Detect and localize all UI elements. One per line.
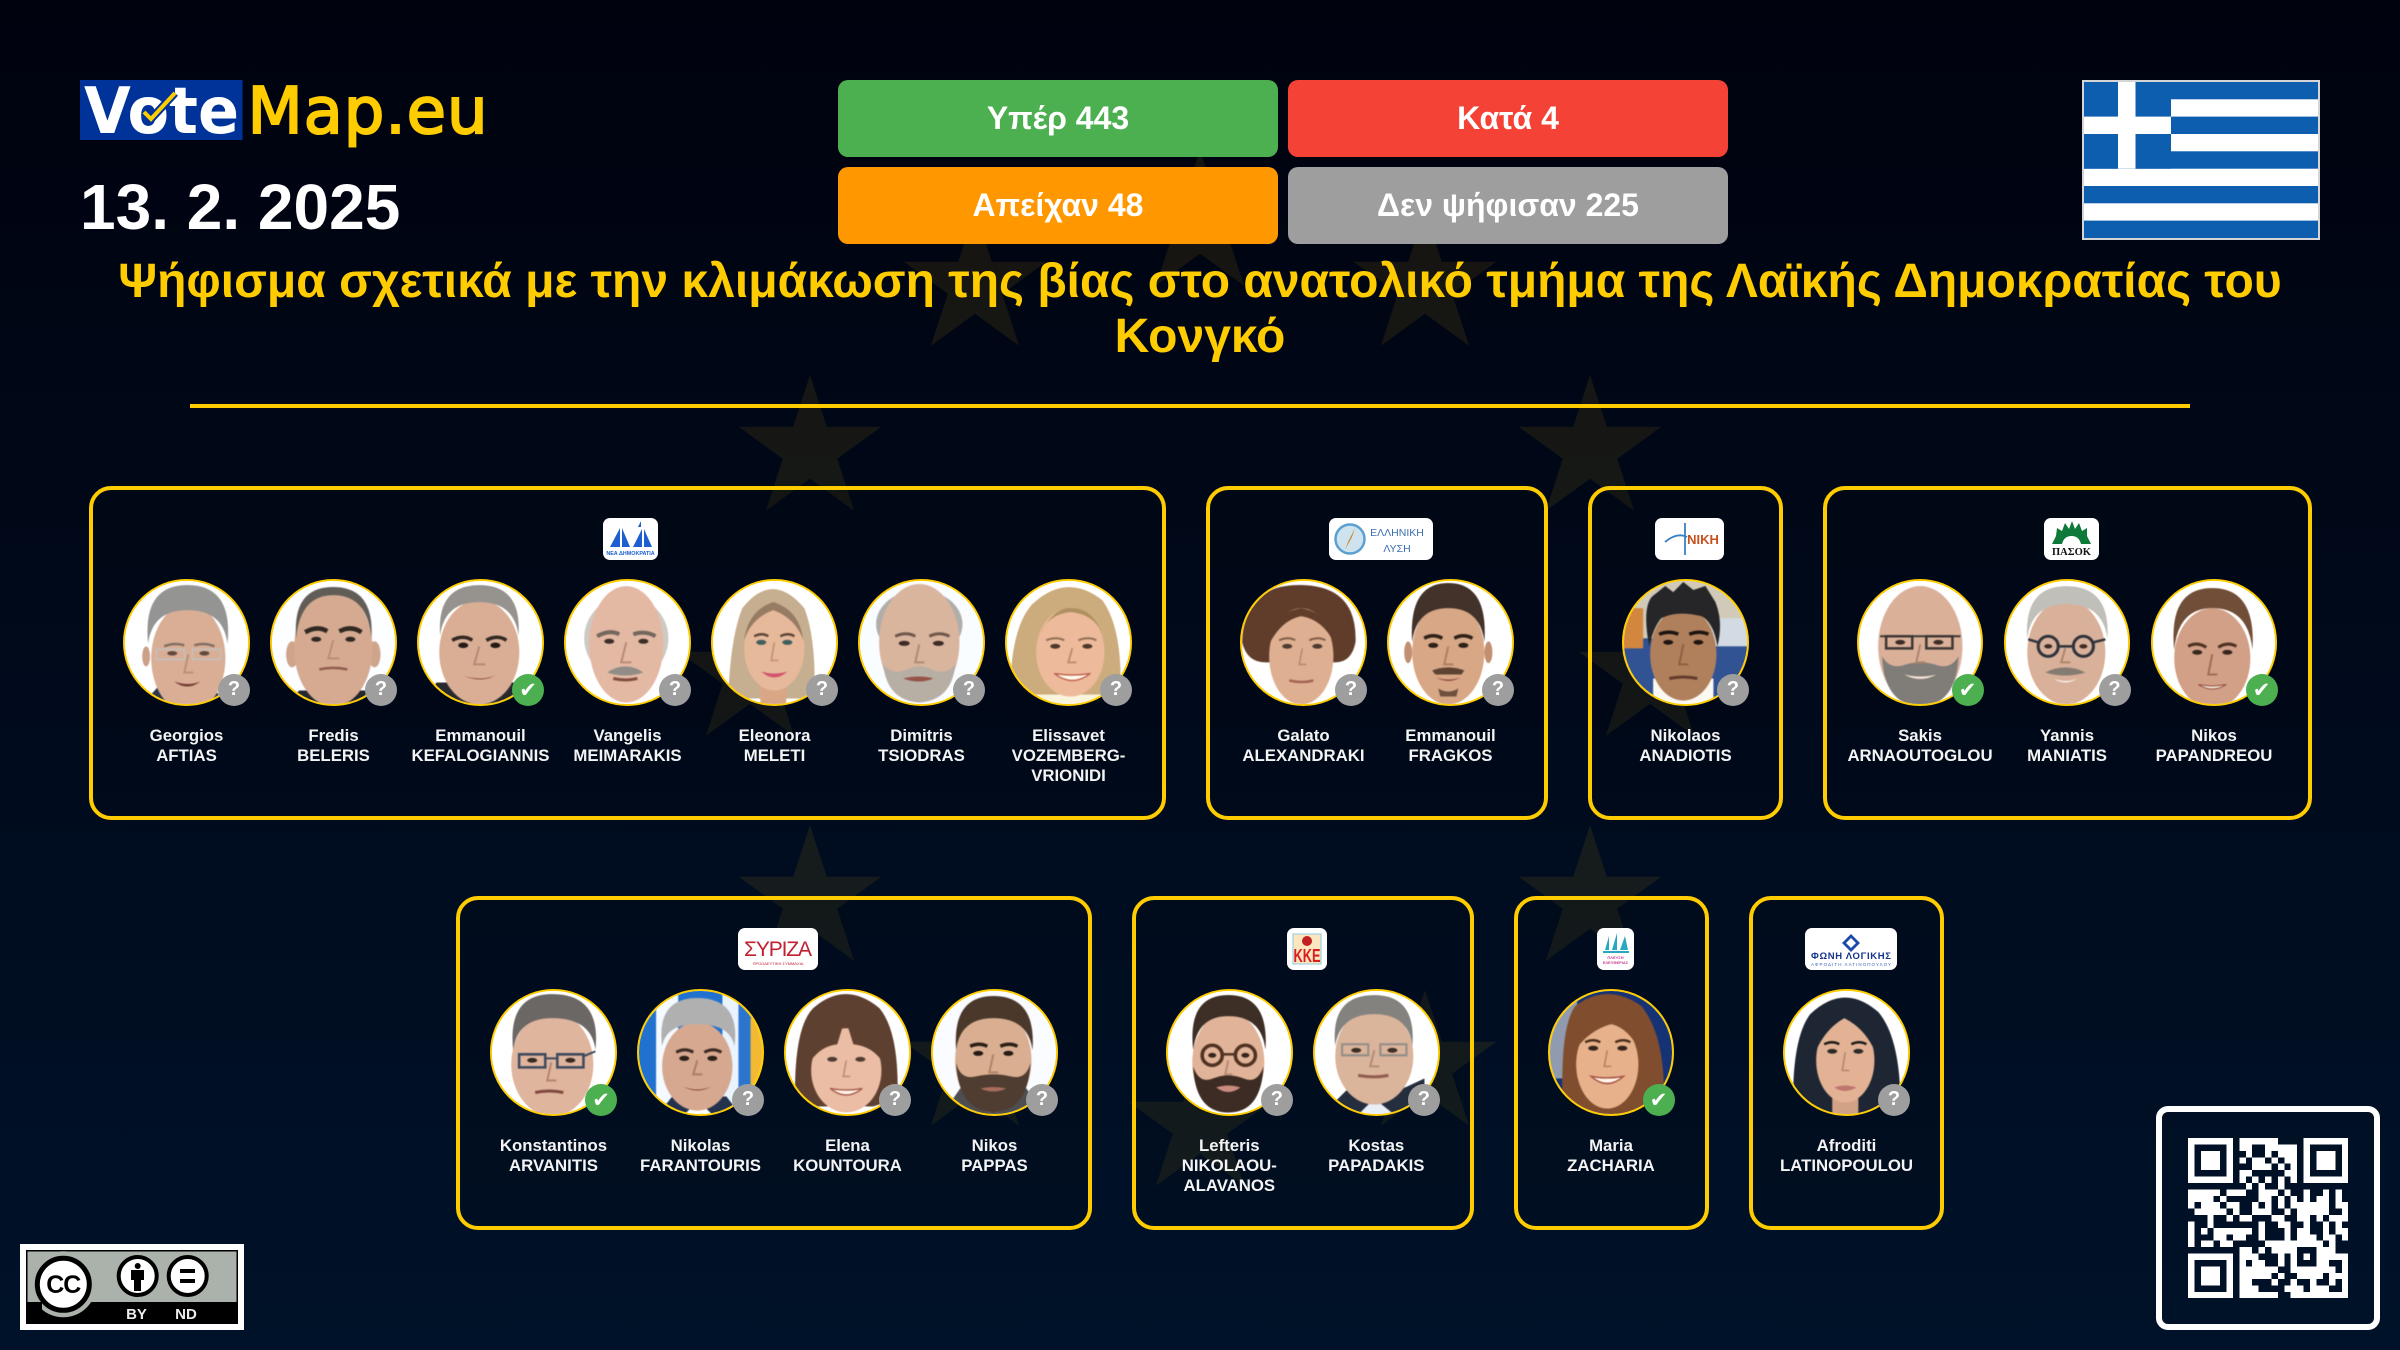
- name: Emmanouil: [435, 726, 526, 745]
- member: Kostas Papadakis: [1313, 989, 1440, 1175]
- photo: [1622, 579, 1749, 706]
- flag: Greece: [2082, 80, 2320, 240]
- status: for: ✔: [592, 1088, 610, 1112]
- name: Nikos: [2191, 726, 2237, 745]
- status: unknown: ?: [1110, 678, 1122, 700]
- photo: [711, 579, 838, 706]
- member: Elissavet Vozemberg-Vrionidi: [1005, 579, 1132, 785]
- status: unknown: [1026, 1084, 1058, 1116]
- status: unknown: [1261, 1084, 1293, 1116]
- panel: Niki: [1588, 486, 1783, 820]
- status: unknown: [732, 1084, 764, 1116]
- name: VOZEMBERG-: [1012, 746, 1125, 765]
- name: NIKOLAOU-: [1182, 1156, 1277, 1175]
- name: ALEXANDRAKI: [1242, 746, 1365, 765]
- member: Galato Alexandraki: [1240, 579, 1367, 765]
- status: unknown: ?: [816, 678, 828, 700]
- party logo: Plefsi Eleftherias: ΕΛΕΥΘΕΡΙΑΣ: [1602, 960, 1628, 965]
- status: unknown: ?: [228, 678, 240, 700]
- member: Konstantinos Arvanitis: [490, 989, 617, 1175]
- status: unknown: [1408, 1084, 1440, 1116]
- name: Galato: [1277, 726, 1330, 745]
- member: Eleonora Meleti: [711, 579, 838, 765]
- status: for: [1642, 1084, 1674, 1116]
- name: [1242, 726, 1365, 765]
- status: unknown: [1100, 674, 1132, 706]
- photo: [1857, 579, 1983, 706]
- name: PAPPAS: [961, 1156, 1028, 1175]
- member: Yannis Maniatis: [2004, 579, 2131, 765]
- name: BELERIS: [297, 746, 370, 765]
- status: unknown: [365, 674, 397, 706]
- photo: [1166, 989, 1293, 1116]
- date: 13. 2. 2025: [80, 171, 400, 243]
- party logo: SYRIZA: ΠΡΟΟΔΕΥΤΙΚΗ ΣΥΜΜΑΧΙΑ: [753, 961, 804, 966]
- status: unknown: [1482, 674, 1514, 706]
- name: Konstantinos: [500, 1136, 607, 1155]
- name: Maria: [1589, 1136, 1633, 1155]
- status: unknown: ?: [1271, 1088, 1283, 1110]
- status: unknown: [806, 674, 838, 706]
- party logo: KKE: [1287, 928, 1327, 970]
- name: VRIONIDI: [1031, 766, 1106, 785]
- status: unknown: ?: [2108, 678, 2121, 700]
- status: unknown: ?: [1418, 1088, 1430, 1110]
- member: Fredis Beleris: [270, 579, 397, 765]
- name: Emmanouil: [1405, 726, 1496, 745]
- party logo: Foni Logikis: [1805, 928, 1897, 970]
- photo: [1240, 579, 1367, 706]
- name: [793, 1136, 902, 1175]
- status: unknown: [2098, 674, 2130, 706]
- name: KEFALOGIANNIS: [412, 746, 550, 765]
- status: for: ✔: [2253, 678, 2270, 702]
- name: [573, 726, 682, 765]
- name: Kostas: [1348, 1136, 1404, 1155]
- status: unknown: [1878, 1084, 1910, 1116]
- name: [150, 726, 223, 765]
- name: ANADIOTIS: [1639, 746, 1732, 765]
- photo: [1005, 579, 1132, 706]
- name: [739, 726, 811, 765]
- party logo: SYRIZA: ΣΥΡΙΖΑ: [744, 938, 812, 961]
- photo: [637, 989, 764, 1116]
- party logo: Niki: ΝΙΚΗ: [1687, 532, 1719, 547]
- panel: KKE: [1132, 896, 1474, 1230]
- name: Eleonora: [739, 726, 810, 745]
- name: ZACHARIA: [1567, 1156, 1655, 1175]
- photo: [123, 579, 250, 706]
- party logo: ND: [603, 518, 658, 560]
- status: unknown: ?: [1492, 678, 1504, 700]
- name: [961, 1136, 1028, 1175]
- vote tally: for: Υπέρ 443: [987, 100, 1129, 136]
- name: [1847, 726, 1993, 765]
- party logo: Elliniki Lysi: ΛΥΣΗ: [1383, 543, 1411, 555]
- party logo: PASOK: [2044, 518, 2099, 560]
- name: ALAVANOS: [1183, 1176, 1275, 1195]
- name: [412, 726, 550, 765]
- vote tally: abstained: [838, 167, 1278, 244]
- photo: [1783, 989, 1910, 1116]
- member: Vangelis Meimarakis: [564, 579, 691, 765]
- name: Lefteris: [1199, 1136, 1260, 1155]
- vote tally: abstained: Απείχαν 48: [973, 187, 1143, 223]
- name: ARNAOUTOGLOU: [1847, 746, 1993, 765]
- name: [640, 1136, 761, 1175]
- status: unknown: ?: [375, 678, 387, 700]
- photo: [564, 579, 691, 706]
- party logo: SYRIZA: [738, 928, 818, 970]
- name: FARANTOURIS: [640, 1156, 761, 1175]
- name: Nikolas: [671, 1136, 730, 1155]
- panel: Elliniki Lysi: [1206, 486, 1548, 820]
- photo: [1387, 579, 1514, 706]
- party logo: ND: ΝΕΑ ΔΗΜΟΚΡΑΤΙΑ: [606, 551, 655, 557]
- status: unknown: ?: [1345, 678, 1357, 700]
- photo: [784, 989, 911, 1116]
- status: unknown: [953, 674, 985, 706]
- member: Nikos Pappas: [931, 989, 1058, 1175]
- photo: [1313, 989, 1440, 1116]
- title: Κονγκό: [1115, 310, 1285, 363]
- name: Nikolaos: [1651, 726, 1720, 745]
- party logo: Foni Logikis: ΑΦΡΟΔΙΤΗ ΛΑΤΙΝΟΠΟΥΛΟΥ: [1811, 962, 1891, 967]
- status: unknown: [1335, 674, 1367, 706]
- party logo: Plefsi Eleftherias: [1596, 928, 1634, 970]
- status: for: ✔: [1650, 1088, 1667, 1112]
- status: for: ✔: [1959, 678, 1976, 702]
- status: unknown: ?: [1727, 678, 1739, 700]
- name: LATINOPOULOU: [1780, 1156, 1913, 1175]
- status: unknown: ?: [963, 678, 975, 700]
- status: unknown: [1717, 674, 1749, 706]
- name: MELETI: [744, 746, 805, 765]
- photo: [417, 579, 544, 706]
- status: unknown: ?: [889, 1088, 901, 1110]
- status: unknown: ?: [742, 1088, 754, 1110]
- member: Elena Kountoura: [784, 989, 911, 1175]
- name: PAPANDREOU: [2156, 746, 2272, 765]
- member: Nikolas Farantouris: [637, 989, 764, 1175]
- party logo: Elliniki Lysi: ΕΛΛΗΝΙΚΗ: [1370, 527, 1424, 539]
- vote tally: against: [1288, 80, 1728, 157]
- status: unknown: ?: [1888, 1088, 1900, 1110]
- name: MANIATIS: [2027, 746, 2107, 765]
- name: [1405, 726, 1496, 765]
- vote tally: against: Κατά 4: [1457, 100, 1559, 136]
- name: [2027, 726, 2107, 765]
- member: Nikos Papandreou: [2151, 579, 2278, 765]
- name: [500, 1136, 607, 1175]
- party logo: PASOK: ΠΑΣΟΚ: [2052, 547, 2092, 558]
- logo: VoteMap.eu: [80, 80, 488, 149]
- licence badge: CC BY-ND: CC: [46, 1271, 81, 1299]
- party logo: Niki: [1655, 518, 1724, 560]
- member: Afroditi Latinopoulou: [1773, 989, 1920, 1199]
- party logo: Plefsi Eleftherias: ΠΛΕΥΣΗ: [1607, 955, 1623, 960]
- status: unknown: [659, 674, 691, 706]
- photo: [2151, 579, 2277, 706]
- status: for: [585, 1084, 617, 1116]
- vote tally: did not vote: [1288, 167, 1728, 244]
- status: for: [1952, 674, 1984, 706]
- vote tally: for: [838, 80, 1278, 157]
- name: Sakis: [1898, 726, 1942, 745]
- vote tally: did not vote: Δεν ψήφισαν 225: [1377, 187, 1639, 223]
- party logo: Foni Logikis: ΦΩΝΗ ΛΟΓΙΚΗΣ: [1811, 951, 1891, 962]
- panel: Plefsi Eleftherias: [1514, 896, 1709, 1230]
- panel: PASOK: [1823, 486, 2312, 820]
- photo: [2004, 579, 2130, 706]
- photo: [270, 579, 397, 706]
- photo: [1548, 989, 1674, 1116]
- name: [1293, 1136, 1460, 1176]
- name: [297, 726, 370, 765]
- name: Georgios: [150, 726, 223, 745]
- photo: [931, 989, 1058, 1116]
- title: Ψήφισμα σχετικά με την κλιμάκωση της βίας στο ανατολικό τμήμα της Λαϊκής Δημοκρατίας του: [118, 255, 2282, 308]
- name: Yannis: [2040, 726, 2094, 745]
- panel: Nea Dimokratia: [89, 486, 1166, 820]
- name: ARVANITIS: [509, 1156, 598, 1175]
- member: Lefteris Nikolaou-Alavanos: [1166, 989, 1293, 1195]
- status: unknown: [879, 1084, 911, 1116]
- status: unknown: ?: [669, 678, 681, 700]
- photo: [858, 579, 985, 706]
- name: Dimitris: [890, 726, 953, 745]
- name: [2156, 726, 2272, 765]
- panel: Foni Logikis: [1749, 896, 1944, 1230]
- status: unknown: ?: [1036, 1088, 1048, 1110]
- name: [1763, 1136, 1930, 1176]
- name: KOUNTOURA: [793, 1156, 902, 1175]
- name: Nikos: [972, 1136, 1017, 1155]
- member: Sakis Arnaoutoglou: [1847, 579, 1993, 765]
- party logo: Elliniki Lysi: [1329, 518, 1433, 560]
- photo: [490, 989, 617, 1116]
- licence badge: CC BY-ND: [20, 1244, 244, 1330]
- licence badge: CC BY-ND: BY: [126, 1306, 147, 1323]
- name: [878, 726, 965, 765]
- name: AFTIAS: [156, 746, 217, 765]
- name: [1012, 726, 1125, 785]
- status: for: [2246, 674, 2278, 706]
- panel: SYRIZA: [456, 896, 1092, 1230]
- name: [1639, 726, 1732, 765]
- name: [1528, 1136, 1694, 1176]
- name: Afroditi: [1817, 1136, 1876, 1155]
- QR code: [2156, 1106, 2380, 1330]
- name: Vangelis: [593, 726, 662, 745]
- member: Maria Zacharia: [1538, 989, 1684, 1199]
- name: Elena: [825, 1136, 870, 1155]
- title: [118, 255, 2282, 363]
- name: Elissavet: [1032, 726, 1105, 745]
- name: FRAGKOS: [1409, 746, 1492, 765]
- member: Nikolaos Anadiotis: [1622, 579, 1749, 765]
- licence badge: CC BY-ND: ND: [175, 1306, 197, 1323]
- member: Georgios Aftias: [123, 579, 250, 765]
- status: for: ✔: [519, 678, 537, 702]
- title rule: [190, 404, 2190, 408]
- name: [1182, 1136, 1277, 1195]
- status: for: [512, 674, 544, 706]
- name: MEIMARAKIS: [573, 746, 682, 765]
- member: Emmanouil Kefalogiannis: [412, 579, 550, 765]
- name: TSIODRAS: [878, 746, 965, 765]
- name: PAPADAKIS: [1328, 1156, 1424, 1175]
- status: unknown: [218, 674, 250, 706]
- member: Dimitris Tsiodras: [858, 579, 985, 765]
- name: Fredis: [308, 726, 359, 745]
- member: Emmanouil Fragkos: [1387, 579, 1514, 765]
